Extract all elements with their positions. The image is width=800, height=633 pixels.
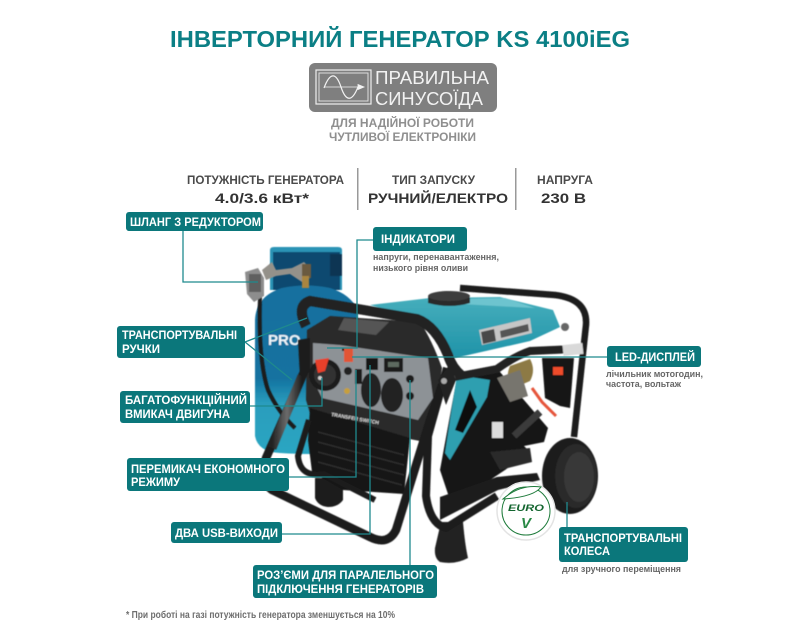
callout: transport wheels: для зручного переміщення: [562, 564, 681, 575]
callout: hose with reducer: [126, 212, 263, 231]
USB and display: [366, 358, 414, 400]
frame tube left: [272, 376, 302, 448]
callout: indicators: напруги, перенавантаження,: [373, 252, 499, 263]
callout: economy mode switch: [127, 458, 289, 491]
badge caption: ЧУТЛИВОЇ ЕЛЕКТРОНІКИ: [329, 129, 476, 144]
callout: engine switch: ВМИКАЧ ДВИГУНА: [125, 407, 230, 421]
callout: indicators: низького рівня оливи: [373, 263, 468, 274]
callout: transport handles: [117, 326, 245, 358]
spring hose: [514, 412, 540, 436]
foot: left: [315, 478, 343, 507]
callout: USB outputs: [171, 522, 282, 543]
callout: engine switch: БАГАТОФУНКЦІЙНИЙ: [125, 392, 247, 407]
lower engine parts: [490, 448, 532, 470]
gas cylinder: PRO: [268, 332, 301, 349]
callout: parallel sockets: [253, 565, 437, 598]
badge: pure sine wave: СИНУСОЇДА: [375, 89, 483, 109]
bottom frame: [264, 372, 442, 540]
callout: LED display: LED-ДИСПЛЕЙ: [615, 349, 695, 364]
front frame: [302, 301, 462, 376]
red cable: [532, 388, 556, 416]
control box: [542, 358, 574, 408]
badge caption: [329, 115, 476, 144]
rear plate: [562, 343, 583, 356]
foot: right: [435, 522, 468, 563]
starter: [508, 359, 533, 388]
callout: indicators: [373, 227, 499, 274]
vent grille: [308, 408, 410, 494]
spec: start type: [368, 173, 508, 206]
title: ІНВЕРТОРНИЙ ГЕНЕРАТОР KS 4100iEG: [170, 25, 630, 52]
callout: engine switch: [120, 391, 250, 423]
label plate: [479, 318, 532, 345]
badge: pure sine wave: [309, 63, 497, 112]
right handle: [460, 288, 586, 437]
callout: parallel sockets: ПІДКЛЮЧЕННЯ ГЕНЕРАТОРІВ: [257, 582, 424, 596]
control body: [306, 316, 442, 442]
vent grille: TRANSFER SWITCH: [331, 412, 380, 426]
socket panel: [313, 343, 433, 420]
badge: pure sine wave: ПРАВИЛЬНА: [375, 68, 489, 88]
callout: parallel sockets: РОЗ’ЄМИ ДЛЯ ПАРАЛЕЛЬНОГО: [257, 568, 434, 582]
spec: voltage: НАПРУГА: [537, 173, 593, 187]
spec: voltage: 230 В: [541, 190, 586, 206]
wheel: [542, 438, 598, 514]
icon: Euro V badge: V: [521, 515, 533, 532]
inner loop: [298, 420, 375, 500]
gas hose with reducer: [245, 262, 311, 428]
leader lines: [183, 231, 607, 565]
red switch dial: [309, 358, 341, 391]
gas cylinder: [255, 247, 358, 454]
callout: indicators: ІНДИКАТОРИ: [381, 232, 455, 246]
lower tank tube: [455, 349, 575, 377]
icon: Euro V badge: [497, 482, 555, 540]
spec: power: [187, 173, 344, 206]
icon: Euro V badge: EURO: [508, 503, 544, 513]
spec: start type: ТИП ЗАПУСКУ: [392, 173, 476, 187]
footnote: * При роботі на газі потужність генератора зменшується на 10%: [126, 609, 395, 621]
callout: LED display: [606, 346, 703, 390]
callout: transport wheels: [559, 527, 688, 575]
AC sockets: [361, 373, 403, 412]
badge caption: ДЛЯ НАДІЙНОЇ РОБОТИ: [331, 115, 474, 130]
callout: transport wheels: КОЛЕСА: [564, 544, 610, 558]
callout: economy mode switch: РЕЖИМУ: [131, 475, 180, 489]
fuel tank: [370, 297, 560, 358]
callout: USB outputs: ДВА USB-ВИХОДИ: [175, 526, 278, 540]
side bracket: [298, 338, 310, 378]
engine block: [440, 372, 548, 500]
spec: power: 4.0/3.6 кВт*: [215, 190, 310, 206]
callout: LED display: лічильник мотогодин,: [606, 369, 703, 380]
callout: transport wheels: ТРАНСПОРТУВАЛЬНІ: [564, 531, 682, 545]
teal bracket: [445, 375, 490, 460]
indicator lights: [342, 348, 362, 384]
callout: LED display: частота, вольтаж: [606, 379, 681, 390]
frame tube right: [426, 368, 497, 528]
callout: transport handles: РУЧКИ: [122, 342, 160, 356]
spec: start type: РУЧНИЙ/ЕЛЕКТРО: [368, 189, 508, 206]
callout: transport handles: ТРАНСПОРТУВАЛЬНІ: [122, 328, 237, 342]
callout: economy mode switch: ПЕРЕМИКАЧ ЕКОНОМНОГО: [131, 462, 285, 476]
spec: voltage: [537, 173, 593, 206]
icon: sine wave screen: [316, 70, 371, 104]
generator: [264, 288, 586, 563]
spec: power: ПОТУЖНІСТЬ ГЕНЕРАТОРА: [187, 173, 344, 187]
callout: hose with reducer: ШЛАНГ З РЕДУКТОРОМ: [130, 215, 261, 229]
